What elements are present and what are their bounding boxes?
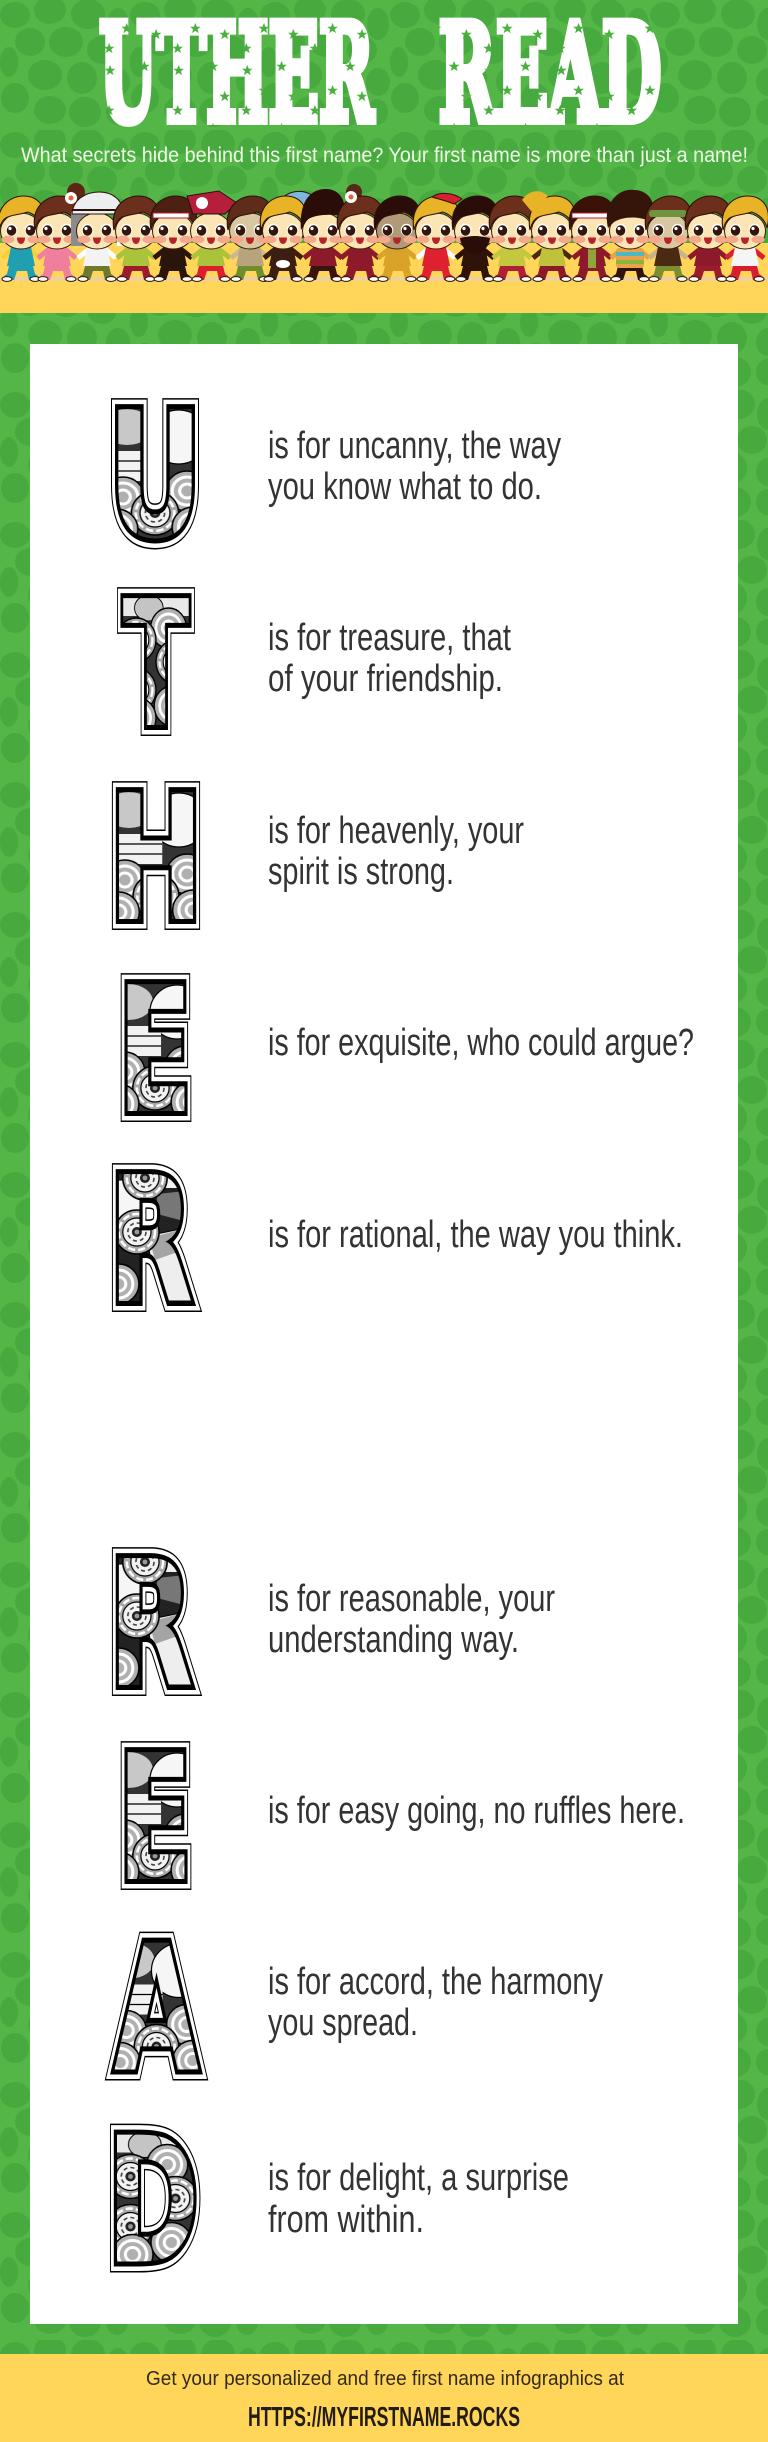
icon: patterned letter T: T (123, 565, 189, 767)
child 16 (569, 196, 615, 281)
row: letter E (118, 951, 694, 1153)
text: D line: from within. (268, 2199, 424, 2241)
child 14 (489, 196, 535, 281)
child 10 (337, 184, 383, 281)
header title (99, 0, 661, 154)
icon: patterned letter R: R (109, 1141, 193, 1343)
icon: patterned letter T: T (123, 565, 189, 767)
child 18 (645, 196, 691, 281)
icon: patterned letter R: R (109, 1525, 193, 1727)
child 17 (607, 190, 654, 281)
icon: patterned letter E: E (118, 951, 192, 1153)
icon: patterned letter E: E (118, 1719, 192, 1921)
icon: patterned letter E: E (118, 951, 192, 1153)
footer url: HTTPS://MYFIRSTNAME.ROCKS (248, 2401, 520, 2432)
child 6 (187, 191, 237, 281)
icon: patterned letter E: E (118, 1719, 192, 1921)
child 9 (301, 189, 345, 281)
child 3 (71, 192, 123, 281)
icon: patterned letter R: R (109, 1525, 193, 1727)
icon: patterned letter R: R (109, 1525, 193, 1727)
row: letter T (123, 565, 511, 767)
child 20 (722, 196, 768, 281)
row: second letter E (118, 1719, 685, 1921)
icon: patterned letter E: E (118, 1719, 192, 1921)
icon: patterned letter U: U (108, 375, 202, 577)
child 8 (260, 191, 313, 281)
text: A line: is for accord, the harmony (268, 1961, 603, 2003)
child 7 (227, 196, 273, 281)
child 4 (113, 196, 159, 281)
row: letter H (109, 758, 524, 961)
yellow band (0, 243, 768, 313)
text: U line: is for uncanny, the way (268, 425, 561, 467)
icon: patterned letter R: R (109, 1141, 193, 1343)
icon: patterned letter U: U (108, 375, 202, 577)
child 15 (522, 191, 575, 281)
text: second R line: understanding way. (268, 1619, 519, 1661)
text: T line: of your friendship. (268, 658, 503, 700)
icon: patterned letter E: E (118, 1719, 192, 1921)
icon: patterned letter R: R (109, 1525, 193, 1727)
footer band (0, 2354, 768, 2442)
icon: patterned letter H: H (109, 758, 203, 961)
icon: patterned letter U: U (108, 375, 202, 577)
footer text: Get your personalized and free first name infographics at (146, 2368, 624, 2390)
child 19 (685, 196, 731, 281)
icon: patterned letter E: E (118, 951, 192, 1153)
row: second letter R (109, 1525, 555, 1727)
child 5 (150, 196, 196, 281)
text: D line: is for delight, a surprise (268, 2157, 569, 2199)
icon: patterned letter U: U (108, 375, 202, 577)
icon: patterned letter T: T (123, 565, 189, 767)
text: U line: you know what to do. (268, 466, 542, 508)
icon: patterned letter D: D (107, 2101, 199, 2303)
icon: patterned letter E: E (118, 951, 192, 1153)
icon: patterned letter R: R (109, 1141, 193, 1343)
row: letter A (114, 1909, 603, 2111)
icon: patterned letter H: H (109, 758, 203, 961)
panel: white content card (30, 344, 738, 2324)
icon: patterned letter D: D (107, 2101, 199, 2303)
row: letter R (109, 1141, 683, 1343)
illustration: row of cartoon children (0, 183, 768, 281)
text: H line: spirit is strong. (268, 851, 454, 893)
text: second R line: is for reasonable, your (268, 1578, 555, 1620)
child 12 (413, 193, 462, 281)
child 2 (34, 183, 85, 281)
text: H line: is for heavenly, your (268, 810, 524, 852)
child 11 (374, 196, 420, 281)
text: T line: is for treasure, that (268, 617, 511, 659)
text: A line: you spread. (268, 2002, 418, 2044)
icon: patterned letter A: A (114, 1909, 199, 2111)
icon: patterned letter D: D (107, 2101, 199, 2303)
icon: patterned letter T: T (123, 565, 189, 767)
row: letter U (108, 375, 561, 577)
child 13 (452, 196, 498, 281)
icon: patterned letter A: A (114, 1909, 199, 2111)
icon: patterned letter R: R (109, 1141, 193, 1343)
icon: patterned letter D: D (107, 2101, 199, 2303)
icon: patterned letter H: H (109, 758, 203, 961)
child 1 (0, 196, 44, 281)
icon: patterned letter H: H (109, 758, 203, 961)
icon: patterned letter A: A (114, 1909, 199, 2111)
row: letter D (107, 2101, 569, 2303)
icon: patterned letter A: A (114, 1909, 199, 2111)
